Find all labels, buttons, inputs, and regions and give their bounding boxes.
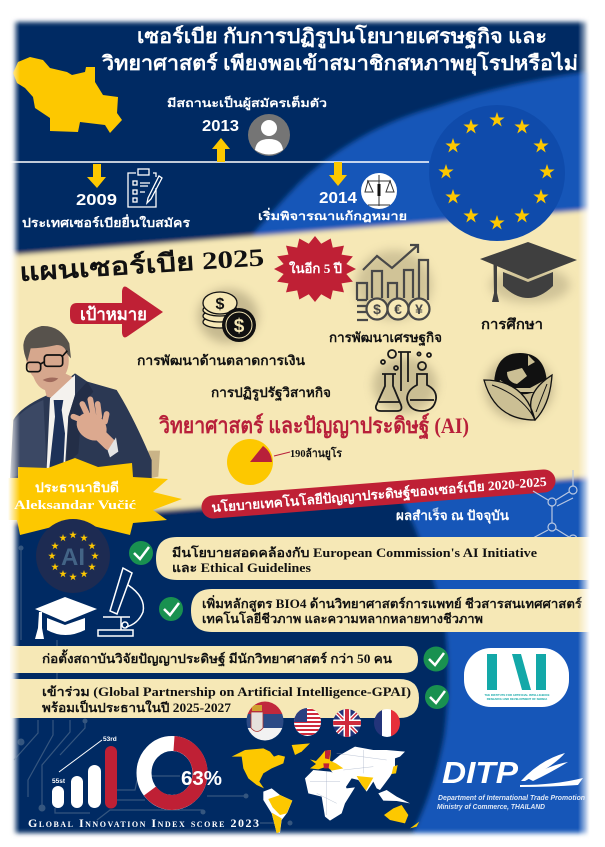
icon: economy chart and coins <box>356 245 432 320</box>
label: Global Innovation Index: Global Innovation Index score 2023 <box>28 816 259 830</box>
europe <box>310 750 343 771</box>
label: education: การศึกษา <box>481 316 543 333</box>
arrow: target <box>70 287 163 337</box>
badge: president name: ประธานาธิบดี <box>35 480 119 495</box>
world map <box>232 743 419 833</box>
logo: DITP <box>437 753 585 811</box>
arrow up <box>212 138 230 162</box>
cream band <box>12 210 590 522</box>
title <box>101 24 578 76</box>
label: economic development: การพัฒนาเศรษฐกิจ <box>329 330 442 347</box>
heading: science and AI: วิทยาศาสตร์ และปัญญาประดิษฐ์ (AI) <box>158 413 469 440</box>
pill: AI institute <box>10 646 418 673</box>
pill: BIO4: เทคโนโลยีชีวภาพ และความหลากหลายทางชีวภาพ <box>202 611 483 626</box>
milestone 2013 <box>167 95 327 162</box>
blue curve lower <box>400 477 590 833</box>
pie chart: budget: 190ล้านยูโร <box>290 446 342 461</box>
logo: AI institute: THE INSTITUTE FOR ARTIFICIAL INTELLIGENCE <box>485 693 550 697</box>
badge: president name <box>8 458 182 535</box>
pill: AI institute: ก่อตั้งสถาบันวิจัยปัญญาประดิษฐ์ มีนักวิทยาศาสตร์ กว่า 50 คน <box>42 649 392 667</box>
india <box>357 776 373 791</box>
logo: DITP: Department of International Trade Promotion <box>438 793 585 802</box>
blue curve upper <box>240 72 590 250</box>
icon: economy chart and coins: $ <box>373 301 381 317</box>
flag: USA <box>293 708 322 736</box>
badge: president name: Aleksandar Vučić <box>14 497 136 512</box>
banner: AI policy: นโยบายเทคโนโลยีปัญญาประดิษฐ์ของเซอร์เบีย 2020-2025 <box>211 473 548 517</box>
label: financial market: การพัฒนาด้านตลาดการเงิน <box>137 353 305 368</box>
icon: coins <box>198 289 258 343</box>
pill: EU policy: มีนโยบายสอดคล้องกับ European Commission's AI Initiative <box>172 545 538 560</box>
greenland <box>292 743 310 755</box>
logo: AI institute <box>464 648 569 707</box>
africa <box>305 770 355 821</box>
icon: coins: $ <box>234 316 245 337</box>
pill: GPAI: พร้อมเป็นประธานในปี 2025-2027 <box>42 700 231 715</box>
pill: EU policy <box>156 537 590 580</box>
icon: microscope <box>98 568 143 636</box>
logo: AI institute: RESEARCH AND DEVELOPMENT OF SERBIA <box>487 697 547 701</box>
icon: graduation cap <box>480 242 577 303</box>
milestone 2014: 2014 <box>319 190 357 207</box>
donut chart: 63 percent: 63% <box>181 768 222 790</box>
flag: Serbia <box>246 701 284 742</box>
pill: BIO4: เพิ่มหลักสูตร BIO4 ด้านวิทยาศาสตร์การแพทย์ ชีวสารสนเทศศาสตร์ <box>202 595 582 612</box>
pill: GPAI <box>10 679 419 718</box>
bar chart: innovation rank: 55st <box>52 778 66 785</box>
heading: Serbia plan 2025: แผนเซอร์เบีย 2025 <box>19 242 265 287</box>
eurasia <box>330 747 405 792</box>
icon: EU flag circle <box>429 105 565 241</box>
icon: white graduation cap <box>35 597 97 639</box>
icon: molecule <box>533 470 577 560</box>
donut chart: 63 percent <box>144 744 222 802</box>
pill: GPAI: เข้าร่วม (Global Partnership on Artificial Intelligence-GPAI) <box>42 685 411 699</box>
person: President Vucic <box>10 326 160 480</box>
arrow down <box>87 164 106 188</box>
milestone 2009: 2009 <box>76 192 117 209</box>
bar chart: innovation rank: 53rd <box>103 736 117 743</box>
icon: economy chart and coins: ¥ <box>415 301 423 317</box>
milestone 2009 <box>22 164 191 230</box>
label: state enterprise reform: การปฏิรูปรัฐวิสาหกิจ <box>211 385 331 402</box>
right edge fade <box>578 15 590 840</box>
check marks <box>129 541 449 709</box>
south america <box>263 788 292 833</box>
arrow down <box>329 162 347 186</box>
north america <box>232 748 285 788</box>
badge: in 5 years <box>274 236 356 302</box>
logo: DITP: Ministry of Commerce, THAILAND <box>437 802 546 811</box>
outer white margin left <box>0 0 8 847</box>
check list <box>10 537 590 718</box>
map of Serbia <box>13 57 122 133</box>
pill: BIO4 <box>191 589 590 632</box>
outer white margin right <box>590 0 605 847</box>
circuit decoration <box>14 546 292 826</box>
left edge fade <box>8 15 20 840</box>
milestone 2014 <box>258 162 407 223</box>
arrow: target: เป้าหมาย <box>80 305 147 324</box>
badge: in 5 years: ในอีก 5 ปี <box>289 260 342 276</box>
pill: EU policy: และ Ethical Guidelines <box>172 561 311 575</box>
southeast asia <box>378 790 410 803</box>
title: เซอร์เบีย กับการปฏิรูปนโยบายเศรษฐกิจ และ <box>137 24 547 50</box>
icon: AI EU circle: AI <box>61 544 85 571</box>
milestone 2014: เริ่มพิจารณาแก้กฎหมาย <box>258 207 407 223</box>
australia <box>384 805 408 823</box>
icon: AI EU circle <box>36 519 110 593</box>
label: current achievements: ผลสำเร็จ ณ ปัจจุบัน <box>396 506 509 524</box>
icon: economy chart and coins: € <box>394 301 402 317</box>
icon: clipboard <box>128 169 162 207</box>
icon: coins: $ <box>216 296 225 313</box>
milestone 2013: มีสถานะเป็นผู้สมัครเต็มตัว <box>167 95 327 111</box>
bar chart: innovation rank <box>52 736 117 808</box>
pie chart: budget <box>227 439 342 485</box>
title: วิทยาศาสตร์ เพียงพอเข้าสมาชิกสหภาพยุโรปหรือไม่ <box>101 51 578 76</box>
icon: globe with leaves <box>484 353 553 420</box>
icon: person avatar <box>248 114 290 156</box>
icon: science flasks <box>373 350 437 413</box>
logo: DITP: DITP <box>442 755 518 790</box>
milestone 2013: 2013 <box>202 118 239 135</box>
flag: France <box>374 709 400 737</box>
flag: UK <box>333 709 361 737</box>
timeline <box>10 161 429 163</box>
icon: law scales <box>361 173 397 209</box>
flags <box>246 701 401 742</box>
milestone 2009: ประเทศเซอร์เบียยื่นใบสมัคร <box>22 214 191 230</box>
